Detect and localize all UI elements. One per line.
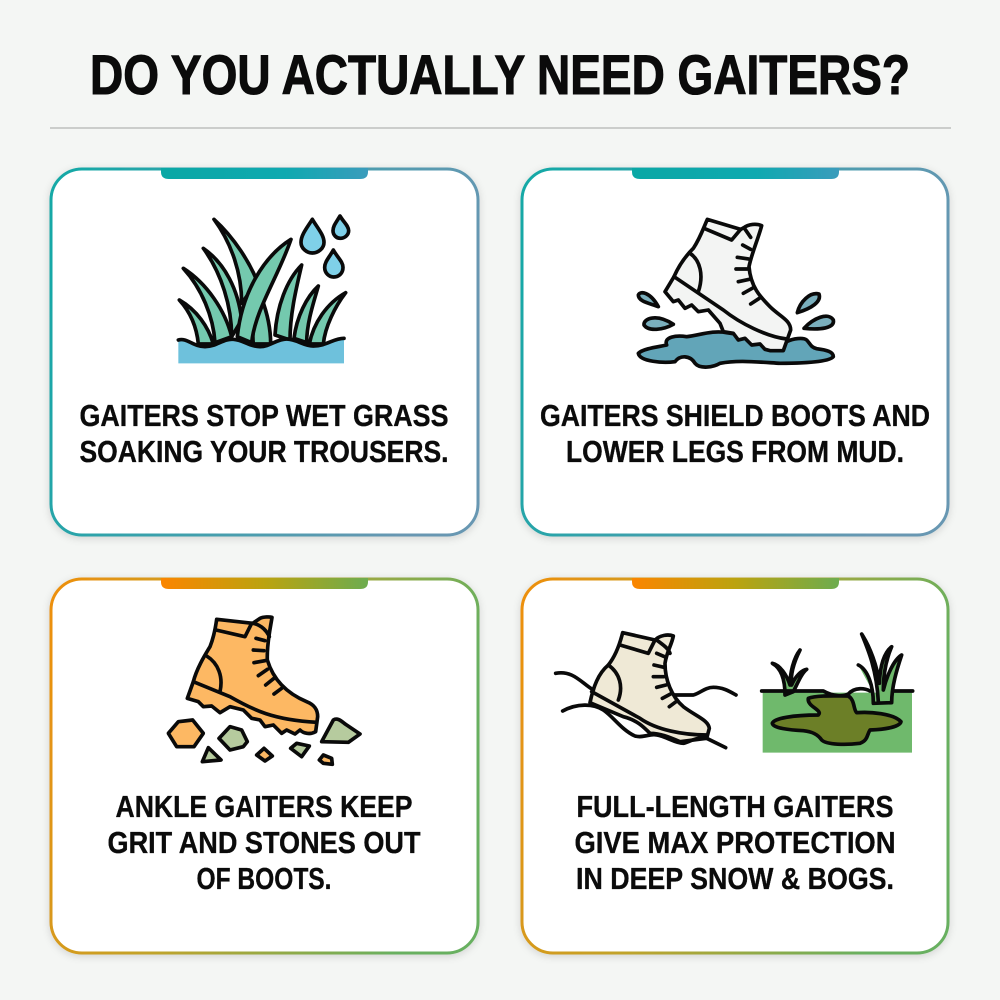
panel: snow and bogs — [522, 578, 948, 953]
icon: boot in snow — [556, 633, 736, 748]
text: wet grass: GAITERS STOP WET GRASS — [80, 398, 448, 433]
text: snow and bogs: IN DEEP SNOW & BOGS. — [576, 861, 894, 896]
text: snow and bogs — [574, 789, 896, 896]
panel: grit and stones — [51, 578, 478, 953]
text: snow and bogs: GIVE MAX PROTECTION — [574, 825, 896, 860]
text: muddy boots: LOWER LEGS FROM MUD. — [566, 434, 904, 469]
text: grit and stones — [108, 789, 421, 896]
text: muddy boots: GAITERS SHIELD BOOTS AND — [540, 398, 930, 433]
text: muddy boots — [540, 398, 930, 469]
text: grit and stones: OF BOOTS. — [196, 861, 332, 896]
text: wet grass: SOAKING YOUR TROUSERS. — [80, 434, 448, 469]
icon: bog with grass — [762, 634, 913, 753]
icon: boot splashing in puddle — [638, 219, 833, 367]
text: grit and stones: GRIT AND STONES OUT — [108, 825, 421, 860]
icon: orange boot on stones — [168, 617, 360, 764]
icon: grass and water drops — [178, 216, 349, 363]
text: wet grass — [80, 398, 448, 469]
panel: wet grass — [51, 168, 478, 535]
panel: muddy boots — [522, 168, 948, 535]
text: snow and bogs: FULL-LENGTH GAITERS — [576, 789, 894, 824]
text: grit and stones: ANKLE GAITERS KEEP — [116, 789, 412, 824]
